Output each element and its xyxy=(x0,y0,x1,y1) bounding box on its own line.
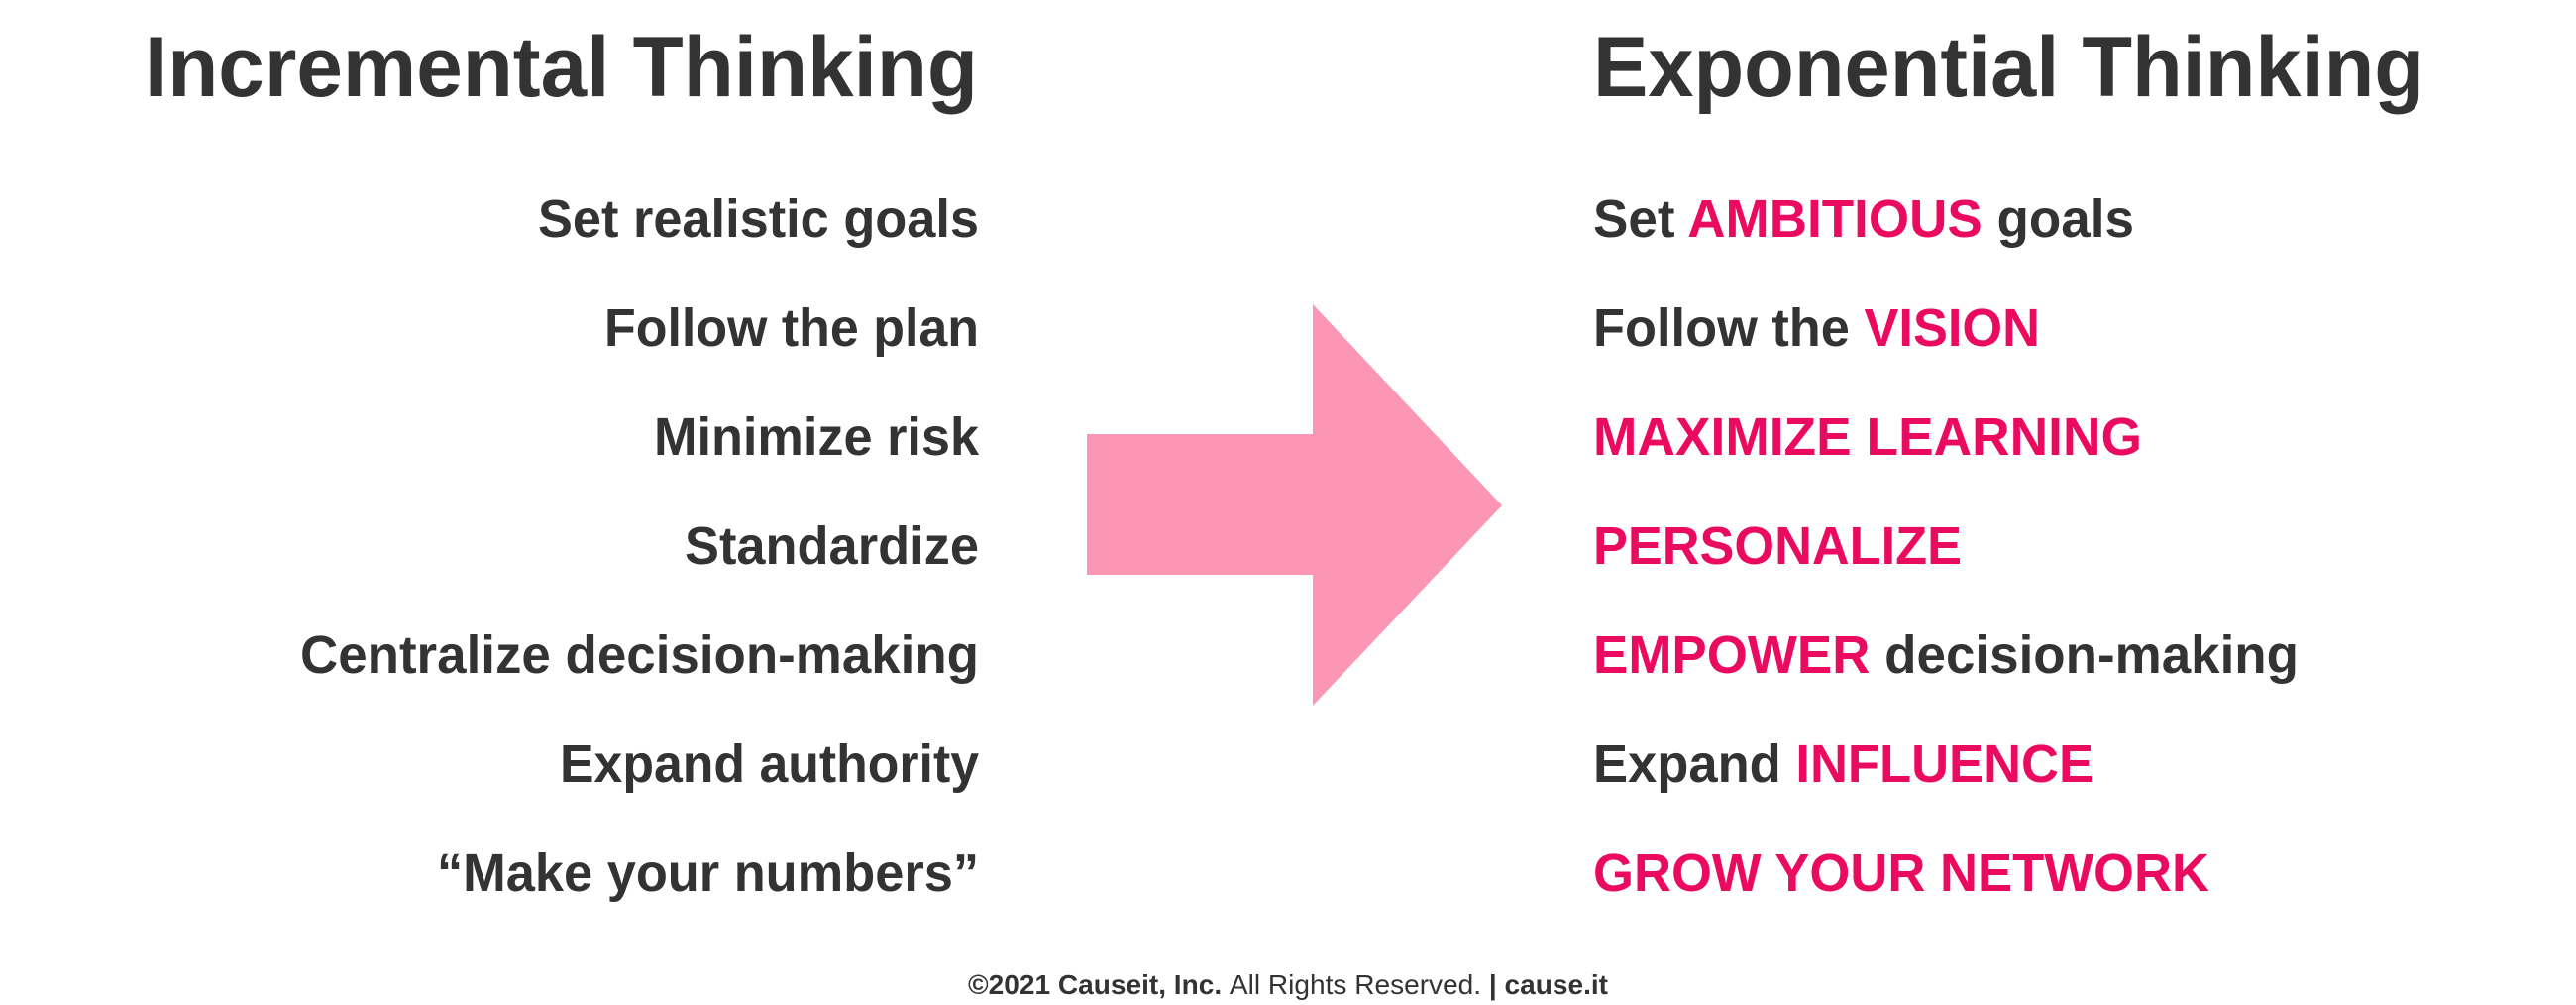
list: incremental items: Centralize decision-making xyxy=(300,625,979,685)
heading: incremental thinking: Incremental Thinking xyxy=(145,20,978,115)
footer: copyright: ©2021 Causeit, Inc. All Rights Reserved. | cause.it xyxy=(968,969,1608,1000)
arrow xyxy=(1087,304,1502,706)
list: exponential items: MAXIMIZE LEARNING xyxy=(1593,407,2142,467)
list: incremental items: “Make your numbers” xyxy=(437,843,979,903)
list: incremental items: Minimize risk xyxy=(654,407,980,467)
list: incremental items: Set realistic goals xyxy=(538,189,979,249)
list: exponential items: Set AMBITIOUS goals xyxy=(1593,189,2134,249)
list: incremental items: Expand authority xyxy=(560,734,979,794)
list: incremental items xyxy=(300,189,980,903)
list: exponential items: PERSONALIZE xyxy=(1593,516,1962,576)
list: exponential items xyxy=(1593,189,2299,903)
heading: exponential thinking: Exponential Thinking xyxy=(1593,20,2424,115)
list: exponential items: Expand INFLUENCE xyxy=(1593,734,2093,794)
list: exponential items: EMPOWER decision-making xyxy=(1593,625,2299,685)
list: exponential items: GROW YOUR NETWORK xyxy=(1593,843,2209,903)
list: incremental items: Standardize xyxy=(685,516,979,576)
list: incremental items: Follow the plan xyxy=(604,298,979,358)
list: exponential items: Follow the VISION xyxy=(1593,298,2040,358)
